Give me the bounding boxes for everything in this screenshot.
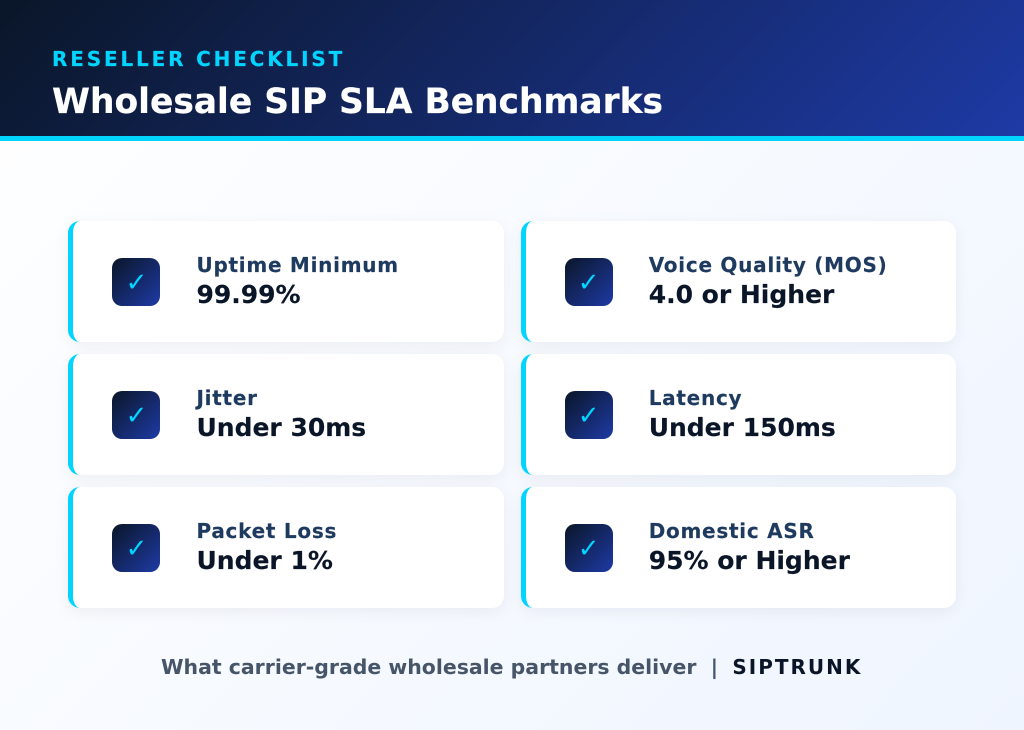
card: packet loss: [68, 487, 504, 608]
icon: check: ✓: [578, 401, 600, 431]
value: Under 30ms: [196, 413, 366, 442]
icon: check: [565, 258, 613, 306]
card: domestic asr: [520, 487, 956, 608]
card: voice quality: [520, 221, 956, 342]
label: Domestic ASR: [649, 519, 815, 543]
label: Jitter: [196, 386, 258, 410]
icon: check: [112, 391, 160, 439]
header banner: [0, 0, 1024, 141]
label: Packet Loss: [196, 519, 337, 543]
icon: check: [565, 524, 613, 572]
eyebrow label: RESELLER CHECKLIST: [52, 47, 345, 71]
value: Under 150ms: [649, 413, 836, 442]
label: Voice Quality (MOS): [649, 253, 888, 277]
icon: check: ✓: [578, 534, 600, 564]
value: 95% or Higher: [649, 546, 850, 575]
title: Wholesale SIP SLA Benchmarks: [52, 82, 663, 122]
footer text: What carrier-grade wholesale partners deliver | SIPTRUNK: [161, 655, 862, 679]
icon: check: [112, 524, 160, 572]
icon: check: ✓: [578, 268, 600, 298]
card: uptime minimum: [68, 221, 504, 342]
icon: check: ✓: [126, 401, 147, 431]
label: Uptime Minimum: [196, 253, 399, 277]
icon: check: [112, 258, 160, 306]
icon: check: [565, 391, 613, 439]
card: latency: [520, 354, 956, 475]
value: 4.0 or Higher: [649, 280, 834, 309]
card: jitter: [68, 354, 504, 475]
value: Under 1%: [196, 546, 333, 575]
icon: check: ✓: [126, 268, 147, 298]
label: Latency: [649, 386, 742, 410]
value: 99.99%: [196, 280, 301, 309]
icon: check: ✓: [126, 534, 147, 564]
